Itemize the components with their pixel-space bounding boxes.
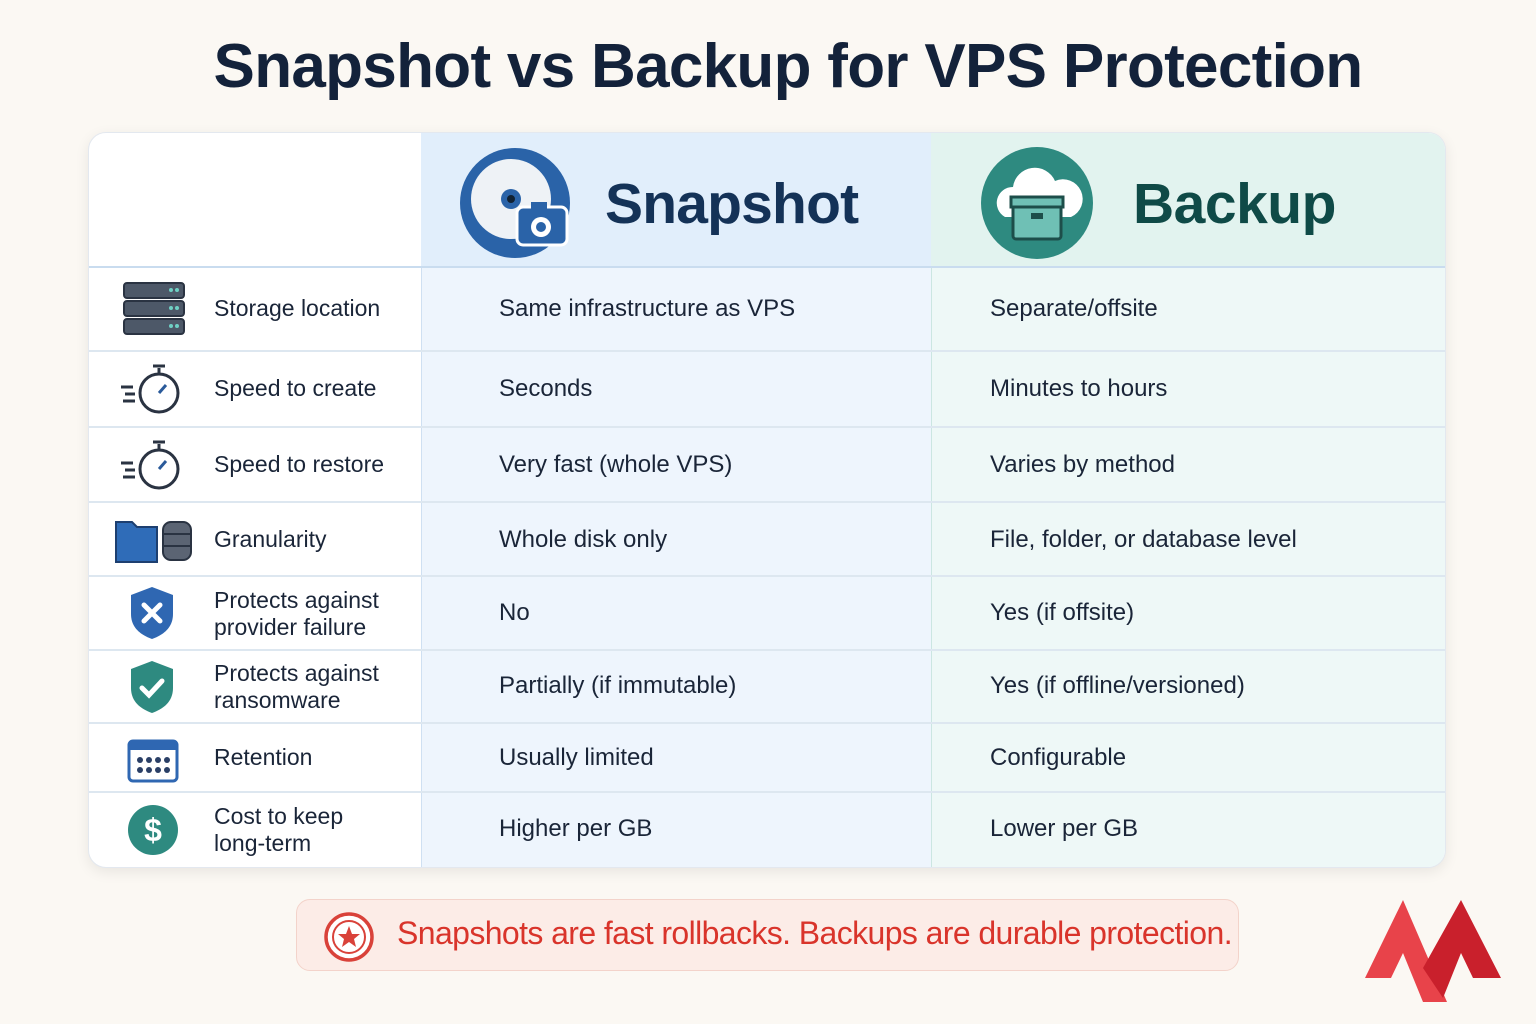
icon: stopwatch — [121, 440, 180, 490]
row: granularity — [115, 521, 1297, 563]
row: ransomware: Protects against — [214, 660, 379, 686]
row: ransomware: ransomware — [214, 687, 341, 713]
row: speed to create: Minutes to hours — [990, 375, 1167, 402]
row: provider failure: provider failure — [214, 614, 366, 640]
row: provider failure: No — [499, 599, 530, 626]
row: storage location — [123, 282, 1158, 335]
row: speed to create: Seconds — [499, 375, 592, 402]
title: Snapshot vs Backup for VPS Protection — [214, 32, 1362, 101]
row: storage location: Separate/offsite — [990, 295, 1158, 322]
icon: dollar coin — [128, 805, 178, 855]
icon: calendar — [128, 740, 178, 782]
row: granularity: File, folder, or database level — [990, 526, 1297, 553]
header: snapshot — [460, 148, 858, 258]
header: snapshot: Snapshot — [605, 172, 858, 236]
row: retention: Configurable — [990, 744, 1126, 771]
callout — [296, 899, 1239, 971]
row: retention — [128, 740, 1126, 782]
row: cost — [128, 803, 1138, 856]
row: provider failure: Yes (if offsite) — [990, 599, 1134, 626]
header: backup — [981, 147, 1336, 259]
row: provider failure — [131, 587, 1134, 640]
row: speed to restore: Speed to restore — [214, 451, 384, 477]
row: speed to restore — [121, 440, 1175, 490]
row: retention: Usually limited — [499, 744, 654, 771]
icon: star badge — [324, 912, 374, 962]
logo — [1365, 900, 1501, 1002]
row: retention: Retention — [214, 744, 312, 770]
row: speed to create: Speed to create — [214, 375, 376, 401]
icon: shield x — [131, 587, 173, 639]
icon: shield check — [131, 661, 173, 713]
row: speed to restore: Very fast (whole VPS) — [499, 451, 732, 478]
row: cost: Lower per GB — [990, 815, 1138, 842]
icon: folder and database — [115, 521, 192, 563]
row: provider failure: Protects against — [214, 587, 379, 613]
row: ransomware — [131, 660, 1245, 713]
row: speed to create — [121, 364, 1167, 414]
panel: comparison table — [88, 132, 1446, 868]
row: granularity: Whole disk only — [499, 526, 667, 553]
icon: server — [123, 282, 185, 335]
callout: Snapshots are fast rollbacks. Backups are durable protection. — [397, 915, 1232, 951]
header: backup: Backup — [1133, 172, 1336, 236]
icon: snapshot disc camera — [460, 148, 570, 258]
row: storage location: Same infrastructure as VPS — [499, 295, 795, 322]
row: cost: Cost to keep — [214, 803, 343, 829]
row: ransomware: Partially (if immutable) — [499, 672, 736, 699]
row: speed to restore: Varies by method — [990, 451, 1175, 478]
row: ransomware: Yes (if offline/versioned) — [990, 672, 1245, 699]
icon: cloud archive — [981, 147, 1093, 259]
row: cost: Higher per GB — [499, 815, 652, 842]
row: cost: long-term — [214, 830, 311, 856]
icon: dollar coin: $ — [144, 812, 162, 848]
icon: stopwatch — [121, 364, 180, 414]
row: storage location: Storage location — [214, 295, 380, 321]
row: granularity: Granularity — [214, 526, 326, 552]
